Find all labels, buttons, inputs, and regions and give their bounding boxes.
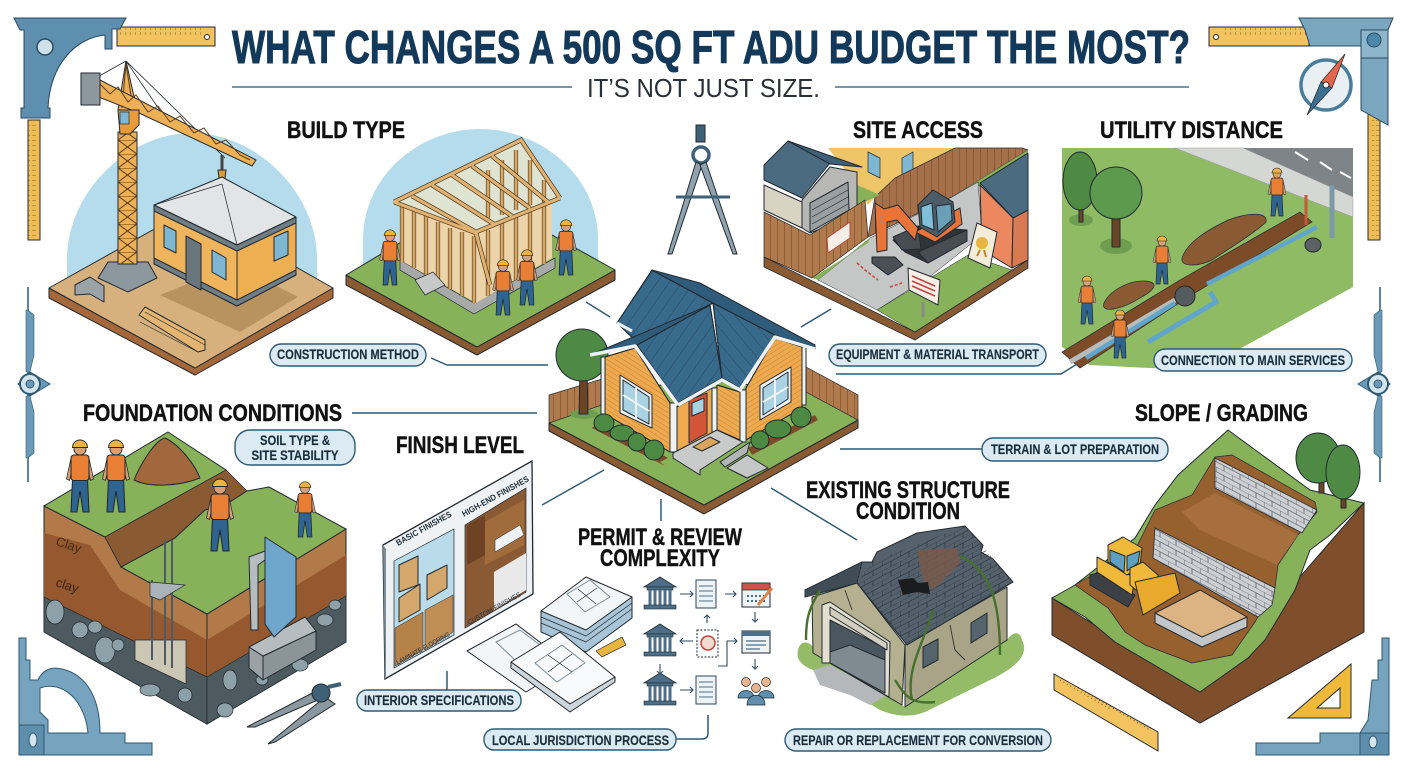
- pill: equipment and material transport: EQUIPMENT & MATERIAL TRANSPORT: [836, 347, 1040, 362]
- heading: existing structure condition: EXISTING STRUCTURE: [806, 477, 1010, 504]
- central house: [549, 270, 858, 514]
- overgrown yard: [798, 633, 1024, 716]
- left pit with rebar: [135, 540, 186, 684]
- concrete yard: [818, 182, 982, 310]
- walls: [812, 583, 1007, 707]
- pill: local jurisdiction process: [484, 729, 676, 750]
- heading: utility distance: UTILITY DISTANCE: [1100, 117, 1283, 144]
- pill: connection to main services: CONNECTION TO MAIN SERVICES: [1161, 353, 1345, 368]
- pill: construction method: CONSTRUCTION METHOD: [277, 347, 419, 362]
- walls: [601, 338, 806, 452]
- ornament: middle right: [1358, 287, 1390, 482]
- upper grass: [44, 432, 226, 537]
- corner: bottom-right ornament: [1256, 638, 1389, 755]
- stamped review doc: [697, 630, 718, 657]
- dirt platform: [49, 208, 333, 375]
- soil piles: [1182, 214, 1266, 265]
- panel: finish level board: CUSTOM FINISHES: [467, 591, 523, 627]
- vines and cracks: [806, 556, 1000, 703]
- high-end finishes: [465, 488, 526, 628]
- heading: slope and grading: SLOPE / GRADING: [1135, 400, 1308, 427]
- orange neighbour: [980, 153, 1028, 268]
- heading: permit and review complexity: [578, 524, 742, 572]
- pill: connection to main services: [1154, 349, 1352, 371]
- corner: top-right bracket and ruler: [1209, 18, 1393, 240]
- porch and walkway: [673, 430, 768, 478]
- green hillside: [1052, 430, 1364, 692]
- left face: [44, 506, 207, 724]
- ground edge: [764, 257, 1028, 340]
- shadow patch: [160, 265, 298, 332]
- trees: [1296, 433, 1360, 508]
- pipes: [1070, 227, 1317, 362]
- panel: foundation cross-section: clay: [54, 575, 81, 596]
- panel: foundation cross-section: [44, 432, 346, 724]
- panel: build type, modular: [49, 61, 333, 375]
- grass base: [549, 380, 858, 514]
- modular unit: [154, 177, 296, 306]
- sky circle: [363, 129, 598, 275]
- utility posts: [1305, 185, 1332, 252]
- flow arrows: [657, 591, 758, 693]
- panel: finish level board: LAMINATE FLOORING: [396, 632, 451, 667]
- pill: repair or replacement: [785, 729, 1051, 751]
- upper retaining wall: [1215, 458, 1317, 533]
- permit flowchart: [644, 577, 774, 705]
- documents: [696, 580, 716, 608]
- pill: local jurisdiction process: LOCAL JURISDICTION PROCESS: [492, 733, 669, 748]
- lower grass: [121, 487, 346, 614]
- roof: [805, 526, 1013, 645]
- small back lawn: [857, 185, 880, 205]
- tree: [556, 329, 608, 419]
- pill: terrain and lot preparation: TERRAIN & LOT PREPARATION: [991, 442, 1159, 457]
- garage door opening: [822, 602, 890, 697]
- lower retaining wall: [1153, 528, 1275, 617]
- panel: utility distance: [1062, 148, 1353, 370]
- grass platform: [346, 195, 615, 355]
- heading: existing structure condition: [806, 477, 1010, 525]
- heading: foundation conditions: FOUNDATION CONDITIONS: [83, 400, 342, 427]
- pill: construction method: [270, 344, 426, 366]
- workers: [1078, 168, 1286, 358]
- right face: [207, 529, 346, 724]
- trees: [1063, 152, 1142, 254]
- steps: [415, 272, 445, 295]
- pill: equipment and material transport: [829, 344, 1046, 366]
- windows: [923, 613, 987, 668]
- heading: existing structure condition: CONDITION: [856, 498, 960, 525]
- driveway: [813, 665, 887, 705]
- yellow permit board: [968, 223, 997, 268]
- panel: slope and grading: [1052, 430, 1364, 723]
- ornament: middle left: [18, 287, 50, 482]
- set square: [1288, 664, 1351, 718]
- windows and door: [620, 367, 791, 443]
- people: [738, 678, 774, 705]
- crane: [81, 61, 256, 292]
- bulldozer: [1090, 537, 1180, 615]
- roof hole and rust: [917, 548, 960, 590]
- panel: site access: [764, 141, 1028, 340]
- pill: soil type and site stability: [235, 430, 355, 465]
- earth block: [1052, 503, 1364, 723]
- heading: permit and review complexity: PERMIT & REVIEW: [578, 524, 742, 551]
- labels: Clay: [54, 534, 84, 556]
- pill: soil type and site stability: SOIL TYPE &: [260, 433, 330, 448]
- heading: site access: SITE ACCESS: [853, 117, 983, 144]
- warning sign front: [908, 268, 940, 317]
- panel: build type, stick-built: [346, 129, 615, 355]
- board captions: BASIC FINISHES: [394, 509, 453, 548]
- green strip: [952, 150, 1028, 197]
- yellow neighbour wall: [828, 148, 955, 205]
- excavator: [872, 190, 967, 275]
- banks: [644, 577, 676, 609]
- heading: permit and review complexity: COMPLEXITY: [600, 545, 720, 572]
- pill: repair or replacement: REPAIR OR REPLACEMENT FOR CONVERSION: [793, 733, 1043, 748]
- connector lines: [352, 302, 1077, 739]
- panel: existing structure garage: [798, 526, 1024, 716]
- roof: [590, 270, 815, 405]
- panel: finish level board: [383, 461, 533, 679]
- red ground marks: [857, 263, 902, 287]
- shrubs: [594, 407, 811, 460]
- pill: terrain and lot preparation: [982, 438, 1168, 461]
- pill: interior specifications: INTERIOR SPECIFICATIONS: [364, 693, 514, 708]
- drafting compass: top centre: [668, 125, 737, 254]
- subtitle: IT’S NOT JUST SIZE.: [587, 73, 820, 103]
- workers: [66, 440, 315, 551]
- basic finishes: [394, 529, 454, 668]
- excavated terraces: [1075, 455, 1317, 663]
- left fence: [764, 200, 868, 278]
- mulch beds: [592, 415, 818, 466]
- pill: interior specifications: [357, 690, 521, 711]
- drafting compass: lower left: [247, 684, 341, 744]
- pill: soil type and site stability: SITE STABILITY: [252, 448, 338, 463]
- concrete pier: [249, 537, 316, 680]
- rear fence: [868, 148, 1028, 237]
- stone pile and lumber: [75, 277, 205, 352]
- soil pile: [134, 438, 200, 485]
- corner: bottom-left ornament: [19, 638, 152, 755]
- rocks: [46, 600, 341, 717]
- grey garage: [764, 141, 862, 233]
- ruler: bottom: [1054, 674, 1158, 751]
- heading: build type: BUILD TYPE: [287, 117, 405, 144]
- sky circle: [67, 133, 317, 290]
- heading: finish level: FINISH LEVEL: [396, 432, 524, 459]
- corner: top-left bracket and ruler: [14, 18, 215, 240]
- blueprints stack: [467, 577, 632, 712]
- trench: [1062, 212, 1312, 368]
- front grass: [877, 255, 1028, 332]
- calendar: [742, 583, 772, 607]
- warning sign left: [827, 222, 850, 253]
- timber frame: [394, 140, 560, 314]
- road and sidewalk: [1243, 148, 1353, 197]
- fences: [549, 367, 858, 423]
- lawn: [1062, 148, 1353, 370]
- icon: compass rose: [1301, 54, 1351, 115]
- slab: [1155, 590, 1247, 647]
- notes doc: [742, 631, 770, 653]
- excavated slope: [105, 470, 269, 567]
- workers: [380, 220, 576, 315]
- panel: finish level board: HIGH-END FINISHES: [460, 474, 531, 519]
